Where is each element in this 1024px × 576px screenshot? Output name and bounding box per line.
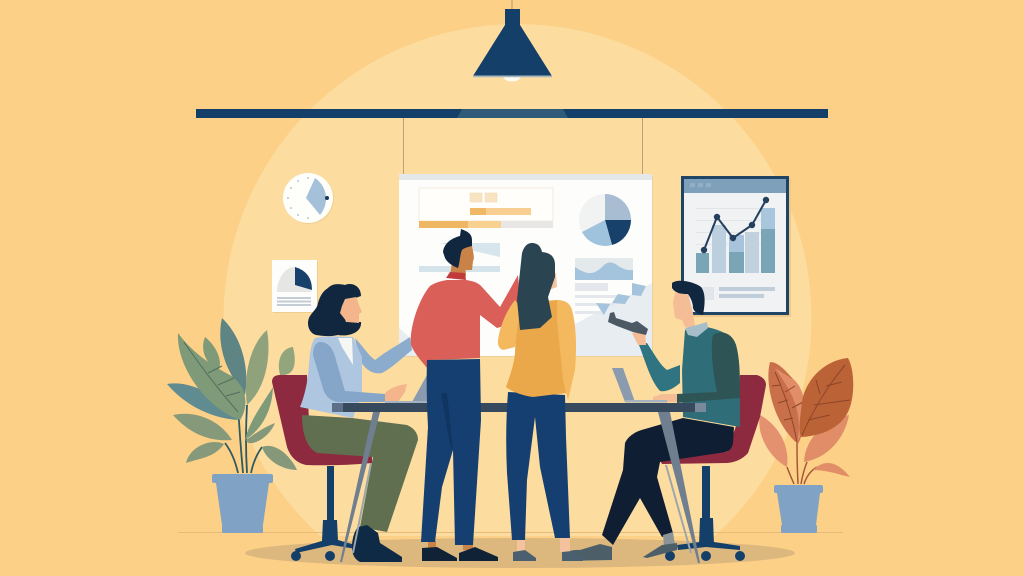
olive trousers	[302, 415, 418, 532]
trousers	[421, 359, 481, 545]
shoes	[422, 547, 457, 561]
face	[340, 297, 362, 323]
shoes	[513, 550, 536, 561]
poster legend	[697, 287, 775, 300]
leaf: right mid coral	[804, 415, 849, 462]
ceiling bar	[196, 109, 828, 118]
poster bar chart	[696, 208, 775, 273]
boots	[352, 525, 402, 562]
far arm	[639, 343, 680, 391]
floor rug shadow	[245, 538, 795, 568]
panel: whiteboard	[399, 174, 653, 357]
person: standing woman in yellow	[498, 243, 583, 561]
ankles	[428, 541, 436, 549]
near arm	[313, 342, 385, 402]
trousers	[602, 418, 734, 545]
leaf: large green	[178, 333, 245, 420]
hand	[385, 384, 407, 402]
hanging wires	[403, 118, 643, 174]
whiteboard text lines	[575, 283, 625, 314]
pot	[774, 485, 823, 533]
leaf: olive upright	[246, 330, 268, 405]
floor line	[178, 532, 843, 533]
right chair	[660, 375, 766, 561]
ankles	[517, 538, 525, 553]
table	[332, 403, 706, 563]
spotlight circle	[224, 24, 812, 536]
left plant	[167, 318, 297, 533]
poster line chart	[701, 197, 769, 253]
flying paper fragments	[596, 283, 646, 315]
far arm	[355, 337, 412, 373]
left sleeve	[498, 300, 520, 350]
wall clock	[283, 173, 334, 224]
hair	[672, 281, 705, 315]
leaf: behind chair	[245, 387, 273, 440]
leaf: back right olive	[279, 347, 295, 375]
person: seated man	[562, 281, 740, 561]
face	[673, 293, 695, 327]
right sleeve	[557, 300, 576, 400]
microphone tool	[608, 312, 648, 335]
hair	[308, 284, 361, 336]
socks	[663, 532, 675, 546]
hair	[517, 243, 555, 330]
trousers	[506, 392, 570, 540]
wall chart poster	[681, 176, 791, 317]
hair	[443, 229, 472, 268]
plant stems	[787, 443, 817, 484]
leaf: big left	[768, 362, 805, 444]
leaf: mid right	[246, 423, 275, 443]
raised hand	[632, 330, 646, 345]
person: seated woman	[300, 284, 418, 562]
laptops	[385, 368, 667, 403]
leaf: olive low left	[173, 414, 232, 440]
leaf: lower left coral	[759, 415, 787, 467]
yellow top	[506, 300, 566, 397]
whiteboard pie chart	[579, 194, 631, 246]
leaf: lower left	[186, 442, 224, 463]
plant stems	[225, 405, 262, 473]
face	[457, 246, 474, 270]
leaf: big right	[799, 358, 853, 437]
collar	[446, 272, 466, 280]
leaf: long blue left	[167, 383, 238, 420]
pendant lamp	[473, 0, 552, 82]
whiteboard header box	[419, 188, 553, 228]
shoes	[562, 544, 612, 561]
small pie poster	[272, 260, 318, 313]
sweater	[682, 327, 740, 427]
pot	[212, 474, 273, 533]
whiteboard left labels	[419, 243, 500, 272]
right plant	[759, 358, 853, 533]
leaf: lower right	[262, 446, 297, 470]
left chair	[272, 375, 372, 561]
leaf: tall blue	[220, 318, 246, 395]
white collar	[338, 338, 353, 365]
vest	[300, 336, 362, 418]
leaf: small back	[203, 337, 220, 372]
red shirt	[411, 275, 520, 374]
neck skin	[549, 273, 557, 290]
leaf: lower right coral	[813, 463, 850, 477]
person: standing man in red	[411, 229, 520, 561]
trouser crease	[441, 393, 453, 450]
near arm	[677, 332, 740, 403]
neck	[450, 262, 466, 276]
shirt collar	[685, 322, 708, 337]
whiteboard area chart	[575, 258, 633, 280]
near hand	[653, 394, 677, 402]
